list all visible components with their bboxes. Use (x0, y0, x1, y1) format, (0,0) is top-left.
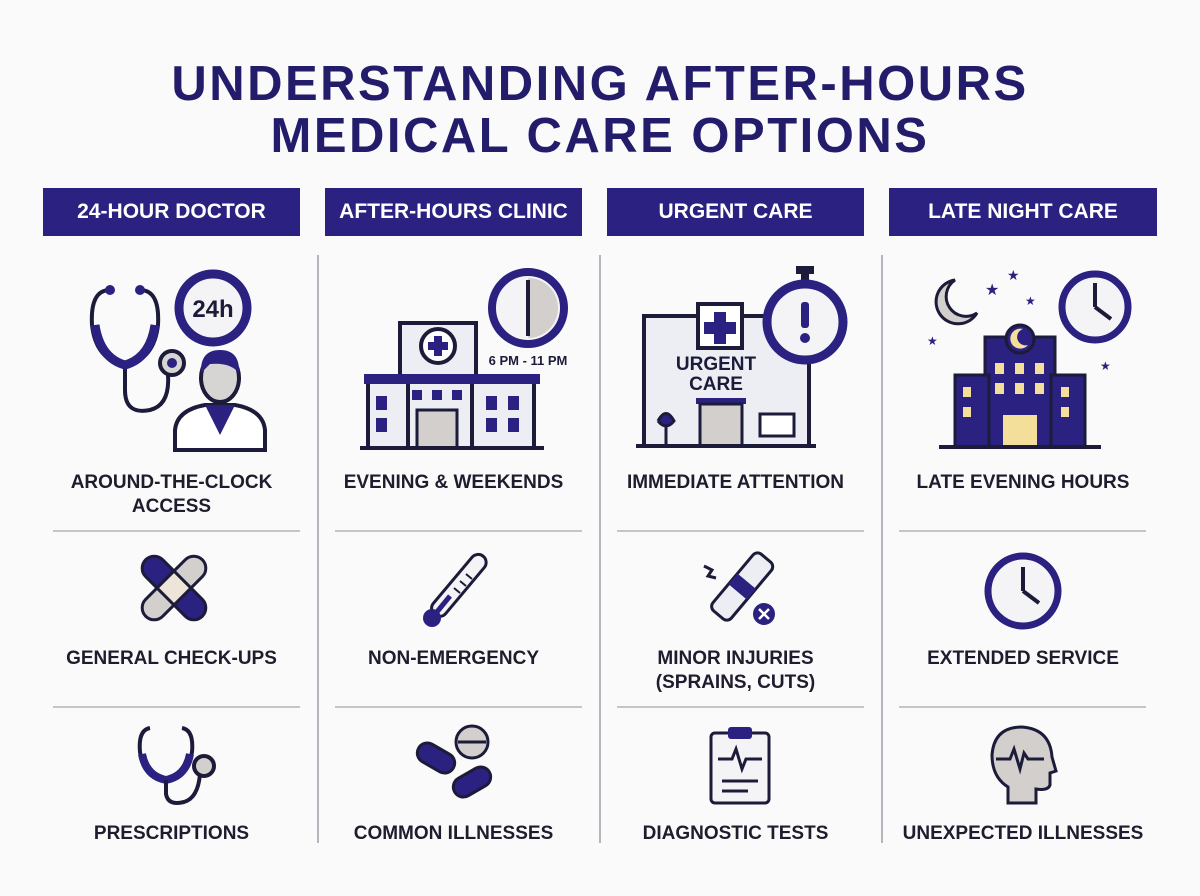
icon: clipboard (710, 727, 770, 804)
icon: urgent care building with stopwatch (636, 266, 848, 448)
label: non-emergency: NON-EMERGENCY (368, 648, 539, 669)
icon: urgent care building with stopwatch: CARE (689, 374, 743, 395)
header: 24-hour doctor: 24-HOUR DOCTOR (77, 200, 266, 223)
icon: night hospital with moon, stars and clock (927, 267, 1132, 449)
icon: pills (416, 724, 492, 798)
label: prescriptions: PRESCRIPTIONS (94, 823, 249, 844)
header: 24-hour doctor (43, 188, 300, 236)
icon: clinic building with clock (360, 268, 568, 450)
label: late evening hours: LATE EVENING HOURS (917, 472, 1129, 493)
icon: injured wrist (703, 551, 775, 625)
label: minor injuries (656, 648, 815, 693)
label: extended service: EXTENDED SERVICE (927, 648, 1119, 669)
label: general check-ups: GENERAL CHECK-UPS (66, 648, 277, 669)
icon: head with heartbeat (990, 726, 1058, 804)
label: minor injuries: (SPRAINS, CUTS) (656, 672, 815, 693)
icon: night hospital with moon, stars and clock: ★ (1025, 294, 1036, 308)
header: after-hours clinic (325, 188, 582, 236)
header: late night care: LATE NIGHT CARE (928, 200, 1118, 223)
icon: clinic building with clock: 6 PM - 11 PM (489, 353, 567, 368)
header: after-hours clinic: AFTER-HOURS CLINIC (339, 200, 568, 223)
label: unexpected illnesses: UNEXPECTED ILLNESSES (903, 823, 1143, 844)
header: late night care (889, 188, 1157, 236)
icon: stethoscope (138, 726, 216, 805)
title (171, 57, 1029, 163)
title: MEDICAL CARE OPTIONS (271, 109, 929, 163)
label: around-the-clock access (71, 472, 272, 517)
label: immediate attention: IMMEDIATE ATTENTION (627, 472, 844, 493)
icon: night hospital with moon, stars and clock: ★ (927, 334, 938, 348)
icon: stethoscope, 24h clock and doctor (90, 270, 267, 452)
label: evening & weekends: EVENING & WEEKENDS (344, 472, 563, 493)
icon: urgent care building with stopwatch: URGENT (676, 354, 756, 375)
icon: bandages (140, 554, 208, 622)
icon: night hospital with moon, stars and clock: ★ (985, 282, 999, 299)
label: around-the-clock access: ACCESS (132, 496, 211, 517)
label: around-the-clock access: AROUND-THE-CLOCK (71, 472, 272, 493)
icon: stethoscope, 24h clock and doctor: 24h (192, 296, 234, 323)
icon: clock (984, 552, 1062, 630)
header: urgent care (607, 188, 864, 236)
label: diagnostic tests: DIAGNOSTIC TESTS (643, 823, 828, 844)
icon: night hospital with moon, stars and clock: ★ (1007, 267, 1020, 283)
header: urgent care: URGENT CARE (658, 200, 812, 223)
title: UNDERSTANDING AFTER-HOURS (171, 57, 1029, 111)
icon: night hospital with moon, stars and clock: ★ (1100, 359, 1111, 373)
icon: thermometer (423, 552, 488, 627)
label: common illnesses: COMMON ILLNESSES (354, 823, 553, 844)
label: minor injuries: MINOR INJURIES (657, 648, 814, 669)
